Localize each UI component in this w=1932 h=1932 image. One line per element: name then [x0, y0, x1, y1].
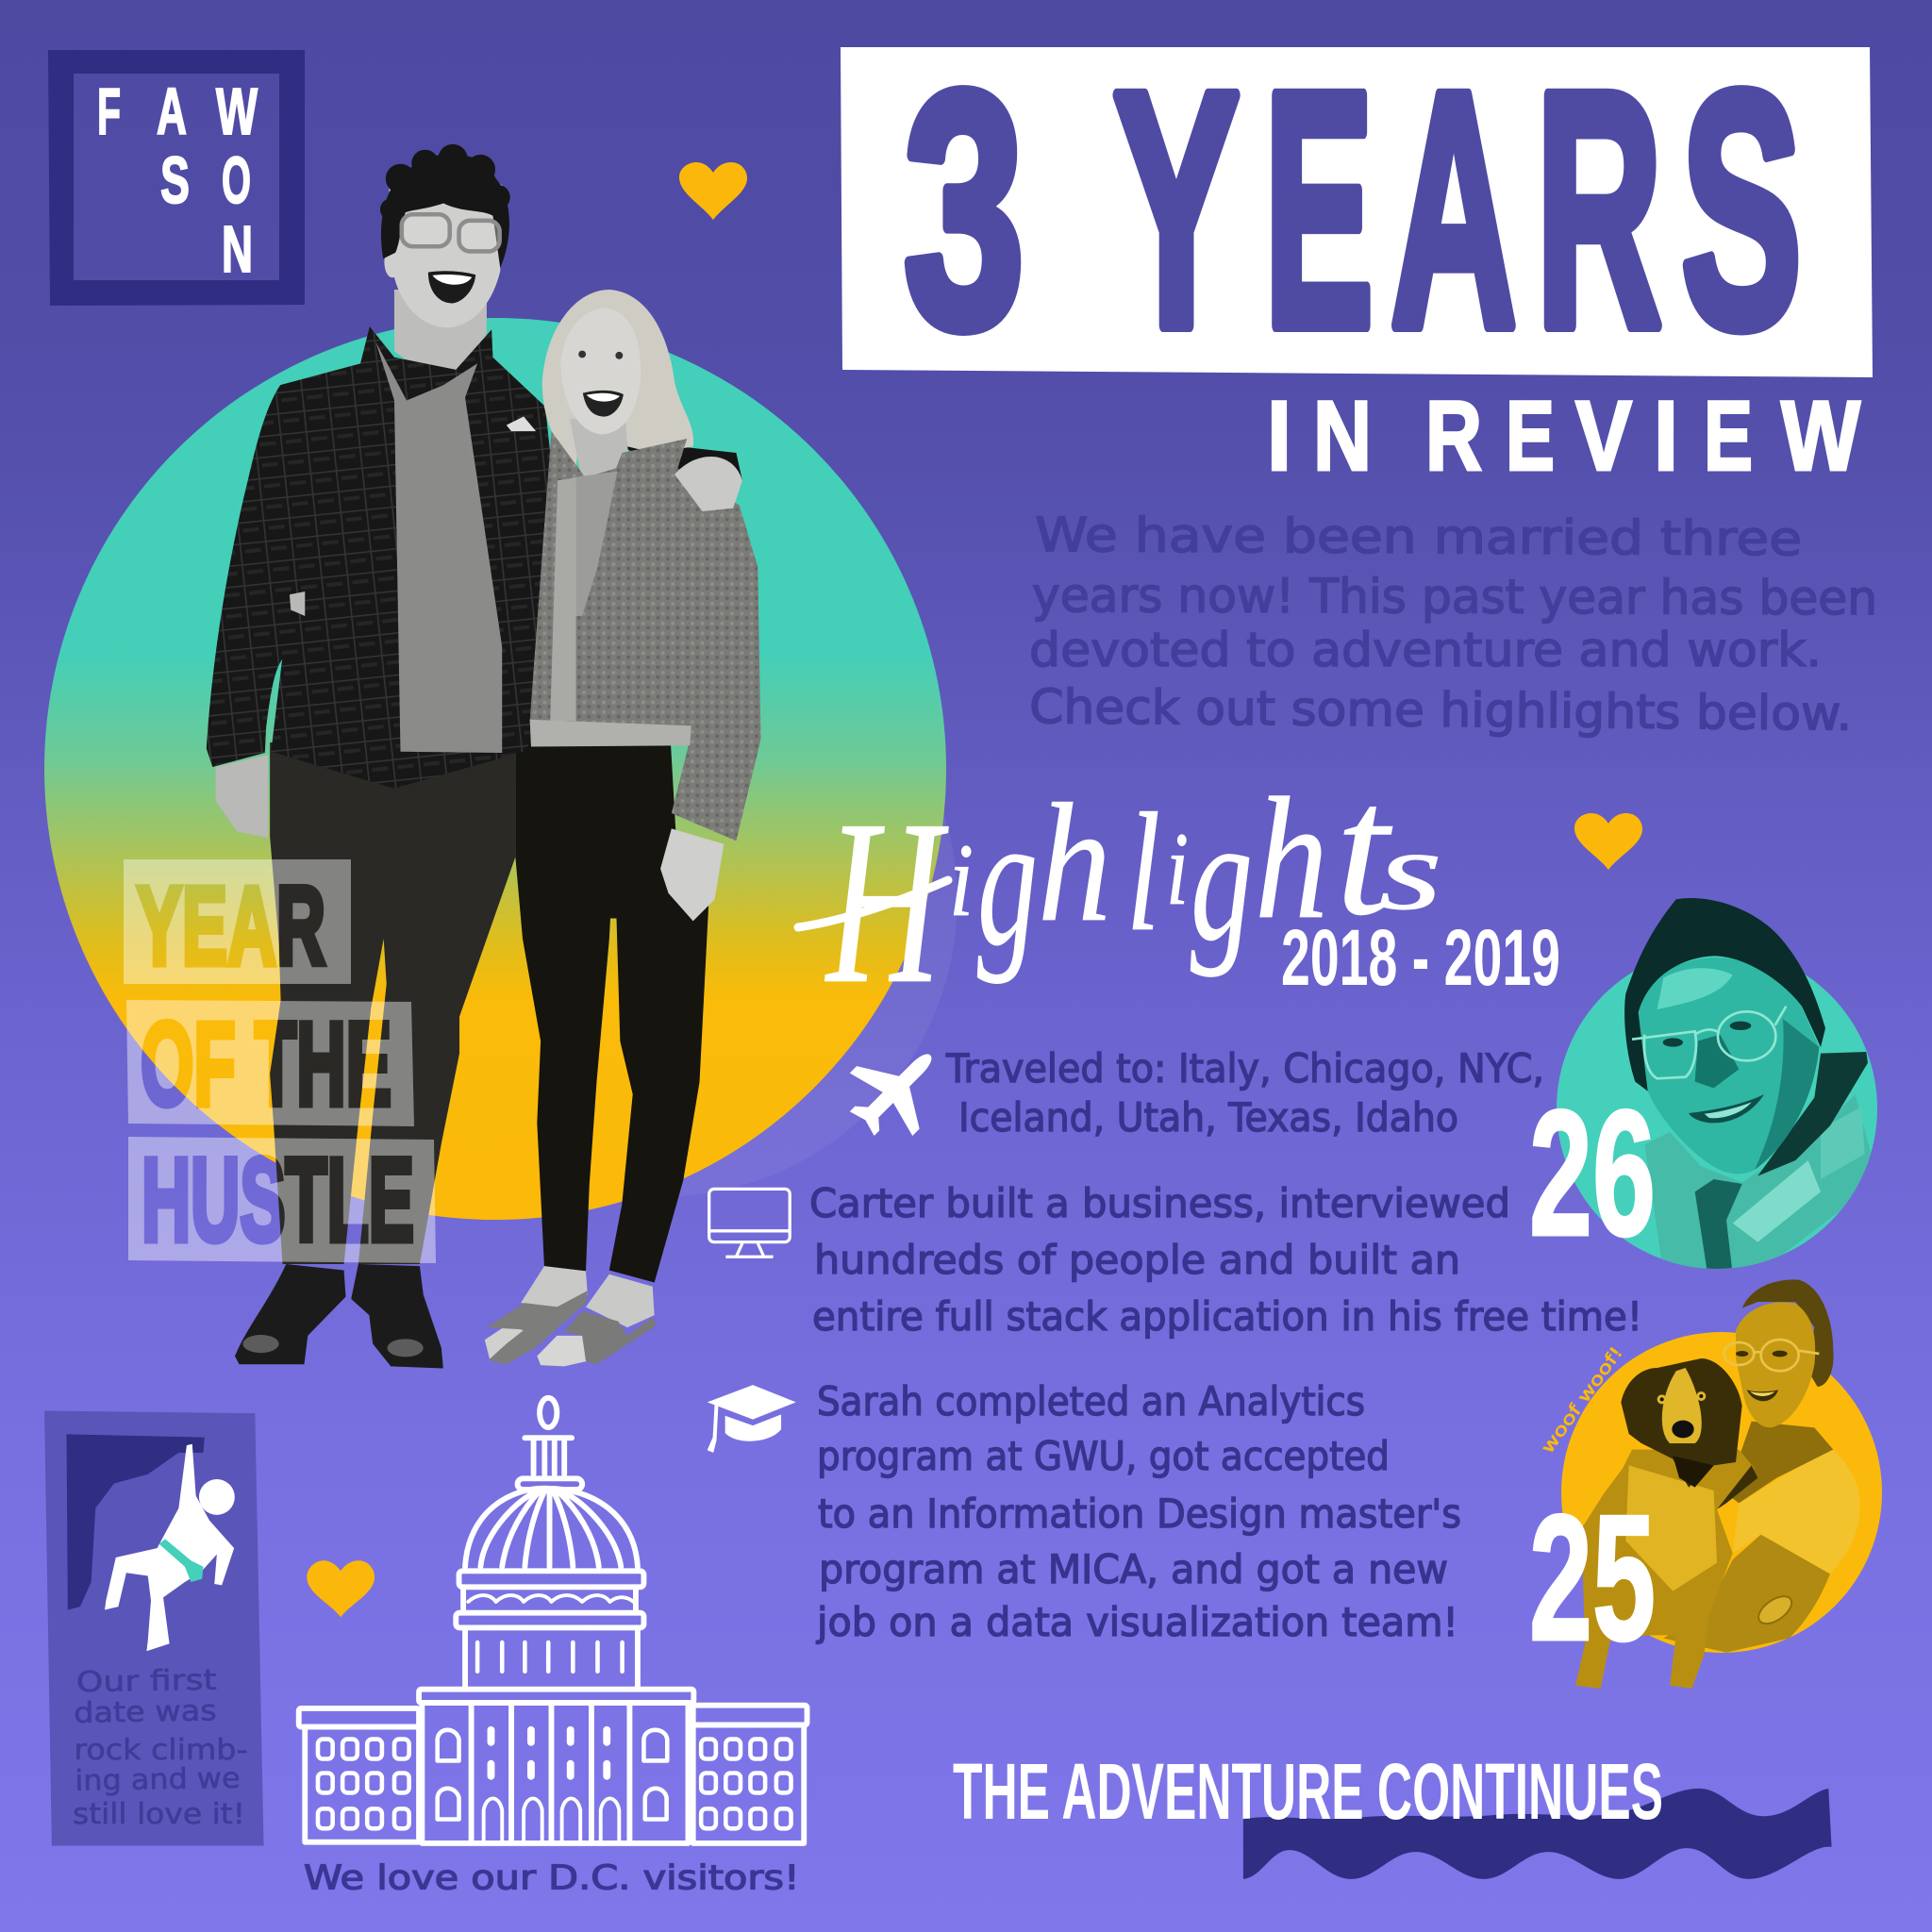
- woman's shirt and placket: [530, 472, 691, 747]
- Sarah item: Sarah completed an Analytics: [817, 1378, 1365, 1424]
- climbing caption: [73, 1664, 248, 1831]
- heading: highlights: i: [1166, 811, 1189, 926]
- Carter item: [809, 1180, 1642, 1340]
- Carter's glasses: [1632, 1007, 1786, 1078]
- subtitle: in review: N: [1313, 381, 1372, 491]
- logo: Fawson: S: [160, 143, 190, 217]
- logo: Fawson: A: [157, 75, 187, 148]
- icon: heart top: [679, 162, 747, 220]
- Sarah item: program at GWU, got accepted: [817, 1433, 1390, 1479]
- man's jacket: [207, 326, 555, 789]
- heading: highlights: t: [1336, 746, 1392, 955]
- logo: Fawson: W: [216, 75, 258, 148]
- subtitle: in review: I: [1654, 381, 1678, 491]
- translucent crescent by circle: [495, 769, 958, 1196]
- woman's neck: [570, 419, 628, 484]
- title panel: 3 YEARS: 3: [904, 24, 1024, 397]
- subtitle: in review: V: [1575, 381, 1632, 491]
- intro text: Check out some highlights below.: [1029, 679, 1852, 741]
- woman's hair: [542, 290, 693, 468]
- icons and lower-left group: [44, 1024, 961, 1897]
- age 26 label: 26: [1529, 1074, 1656, 1274]
- Sarah item: job on a data visualization team!: [816, 1599, 1458, 1645]
- man's neck: [394, 290, 487, 388]
- heading: highlights: l: [1126, 778, 1160, 966]
- man's hand on her shoulder: [675, 457, 742, 511]
- Carter's hat: [1624, 898, 1825, 1091]
- gradient circle: [44, 318, 946, 1220]
- decorative wave: [1243, 1789, 1832, 1879]
- intro text: We have been married three: [1035, 508, 1802, 566]
- woman's face: [560, 308, 641, 434]
- woman's hand: [660, 828, 724, 921]
- panel: first date climbing: [44, 1411, 264, 1846]
- climbing caption: Our first: [76, 1664, 217, 1699]
- Sarah's neck: [1726, 1422, 1833, 1503]
- man's hand: [216, 755, 268, 838]
- overlay text panel: year: [124, 859, 351, 984]
- travel item: Iceland, Utah, Texas, Idaho: [958, 1094, 1458, 1141]
- couple legs and shoes: [235, 742, 708, 1369]
- capitol caption: We love our D.C. visitors!: [304, 1858, 800, 1897]
- Carter item: Carter built a business, interviewed: [809, 1180, 1510, 1226]
- intro text: devoted to adventure and work.: [1029, 623, 1822, 677]
- heading: highlights: g: [1191, 780, 1253, 978]
- climbing caption: still love it!: [73, 1798, 245, 1831]
- icon: monitor: [709, 1189, 790, 1257]
- portrait: Sarah and dog: [1561, 1279, 1882, 1689]
- Sarah's arm: [1663, 1535, 1830, 1653]
- north face logo: [507, 416, 536, 431]
- overlay text panel: of the: [126, 1000, 414, 1126]
- date range: 2018 - 2019: [1281, 913, 1560, 1002]
- dog head: [1621, 1358, 1742, 1488]
- title panel: 3 YEARS: E: [1264, 24, 1374, 397]
- logo: Fawson: F: [97, 75, 121, 148]
- icon: heart right: [1574, 813, 1642, 870]
- man's sleeve around woman: [542, 400, 742, 480]
- highlight list text: [809, 1045, 1642, 1645]
- icon: heart left: [307, 1560, 375, 1617]
- Sarah item: program at MICA, and got a new: [819, 1546, 1448, 1592]
- heading: highlights: g: [977, 776, 1038, 985]
- subtitle: in review: W: [1781, 381, 1860, 491]
- climber figure: [105, 1444, 235, 1651]
- rock wall: [67, 1434, 205, 1609]
- woman's hand on man's back: [290, 591, 305, 616]
- age 25 label: 25: [1529, 1478, 1656, 1678]
- Carter's face: [1637, 958, 1819, 1174]
- man's jeans: [270, 742, 515, 1264]
- icon: graduation cap: [708, 1385, 796, 1453]
- woman's sandals: [485, 1266, 657, 1366]
- heading: highlights: s: [1378, 808, 1442, 933]
- logo: Fawson: [48, 50, 305, 306]
- title panel: 3 YEARS: [841, 24, 1873, 397]
- subtitle: in review: R: [1425, 381, 1482, 491]
- title panel: 3 YEARS: A: [1391, 24, 1517, 397]
- intro text: years now! This past year has been: [1032, 568, 1877, 625]
- travel item: Traveled to: Italy, Chicago, NYC,: [945, 1045, 1544, 1091]
- Sarah's face: [1736, 1302, 1815, 1427]
- logo: Fawson: O: [222, 143, 251, 217]
- Carter's collar: [1757, 1052, 1868, 1176]
- climbing caption: rock climb-: [74, 1734, 248, 1767]
- title panel: 3 YEARS: R: [1536, 24, 1662, 397]
- subtitle: in review: I: [1267, 381, 1291, 491]
- Carter item: entire full stack application in his free time!: [812, 1293, 1642, 1340]
- portrait: Carter: [1557, 898, 1877, 1274]
- travel item: [945, 1045, 1544, 1141]
- climbing caption: date was: [74, 1694, 217, 1730]
- man's shoes: [235, 1264, 443, 1369]
- heading: highlights: h: [1255, 762, 1328, 956]
- photo: couple: [207, 144, 761, 1369]
- Sarah's smile: [1747, 1390, 1778, 1401]
- upper bodies: [207, 144, 761, 921]
- heading: highlights: H: [824, 772, 949, 1033]
- woof woof label: woof woof!: [1538, 1343, 1627, 1457]
- Carter's jacket: [1644, 1094, 1871, 1274]
- woman's fleece: [530, 431, 761, 841]
- Sarah's glasses: [1724, 1340, 1819, 1371]
- title panel: 3 YEARS: S: [1681, 24, 1802, 397]
- Sarah item: to an Information Design master's: [818, 1491, 1461, 1537]
- Carter item: hundreds of people and built an: [814, 1237, 1460, 1283]
- heading: highlights: h: [1038, 769, 1111, 957]
- subtitle: in review: E: [1704, 381, 1753, 491]
- overlay text panel: hustle: [128, 1137, 436, 1263]
- woman's jeans: [515, 742, 708, 1282]
- title panel: 3 YEARS: Y: [1113, 24, 1240, 397]
- man's shirt: [375, 341, 502, 753]
- dog body: [1575, 1450, 1755, 1689]
- climbing caption: ing and we: [75, 1762, 241, 1798]
- logo: Fawson: N: [222, 212, 253, 286]
- Carter's smile: [1689, 1094, 1764, 1123]
- heading: highlights: i: [949, 823, 974, 938]
- subtitle: in review: E: [1506, 381, 1555, 491]
- intro text: [1029, 508, 1877, 741]
- heading: highlights: [798, 746, 1442, 1033]
- illustration: capitol building: [299, 1398, 808, 1843]
- man's face: [380, 144, 510, 327]
- Sarah item: [816, 1378, 1461, 1645]
- Sarah's shirt: [1733, 1450, 1860, 1574]
- icon: plane: [830, 1024, 961, 1155]
- Sarah's hair: [1742, 1279, 1834, 1387]
